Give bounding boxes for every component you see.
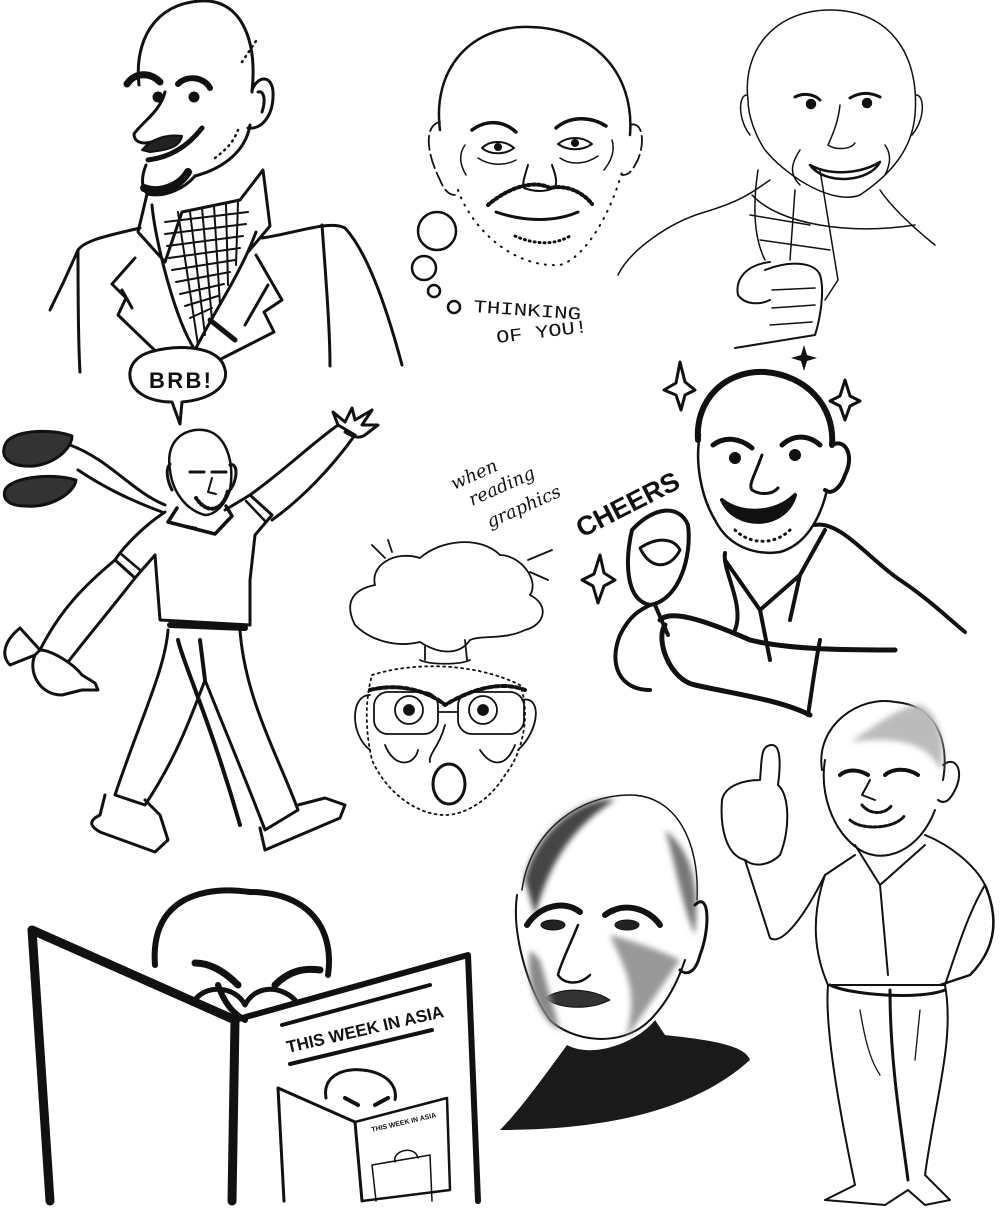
shaded portrait: pencil sketch of man in dark sweater xyxy=(500,795,750,1130)
handwritten text: Thinking of you xyxy=(473,298,589,349)
handwritten text: Thinking of you: THINKING xyxy=(473,298,582,326)
icon: water bottle xyxy=(33,650,98,695)
handwritten note: when reading graphics: when xyxy=(447,455,501,495)
handwritten note: when reading graphics xyxy=(447,455,564,533)
headline: This Week in Asia: THIS WEEK IN ASIA xyxy=(285,1002,446,1057)
icon: shoes held out xyxy=(4,431,76,506)
sparkles xyxy=(582,345,860,603)
big cartoon: man reading newspaper This Week in Asia xyxy=(32,890,478,1201)
text: CHEERS: CHEERS xyxy=(571,466,685,543)
thought bubbles xyxy=(412,212,460,313)
headline: This Week in Asia xyxy=(282,985,446,1064)
handwritten note: when reading graphics: reading xyxy=(465,463,538,511)
caricature: man giving thumbs up xyxy=(722,701,993,1205)
speech bubble: BRB!: BRB! xyxy=(149,368,211,393)
nested newspaper reader: THIS WEEK IN ASIA xyxy=(371,1112,437,1134)
speech bubble: BRB! xyxy=(130,348,226,424)
wine glass xyxy=(628,511,689,635)
sketch: bald man with thought bubble, Thinking of you xyxy=(412,27,642,349)
full figure: walking man with many arms xyxy=(4,408,378,852)
sketch: exploding head reading graphics xyxy=(350,540,552,815)
handwritten text: Thinking of you: OF YOU! xyxy=(495,318,589,349)
thin line portrait: man holding glass xyxy=(618,10,935,348)
nested newspaper reader xyxy=(278,1070,450,1201)
caricature: man in blazer with BRB speech bubble xyxy=(50,1,402,424)
handwritten note: when reading graphics: graphics xyxy=(483,481,564,533)
ink portrait: man with wine glass, Cheers xyxy=(571,345,965,715)
